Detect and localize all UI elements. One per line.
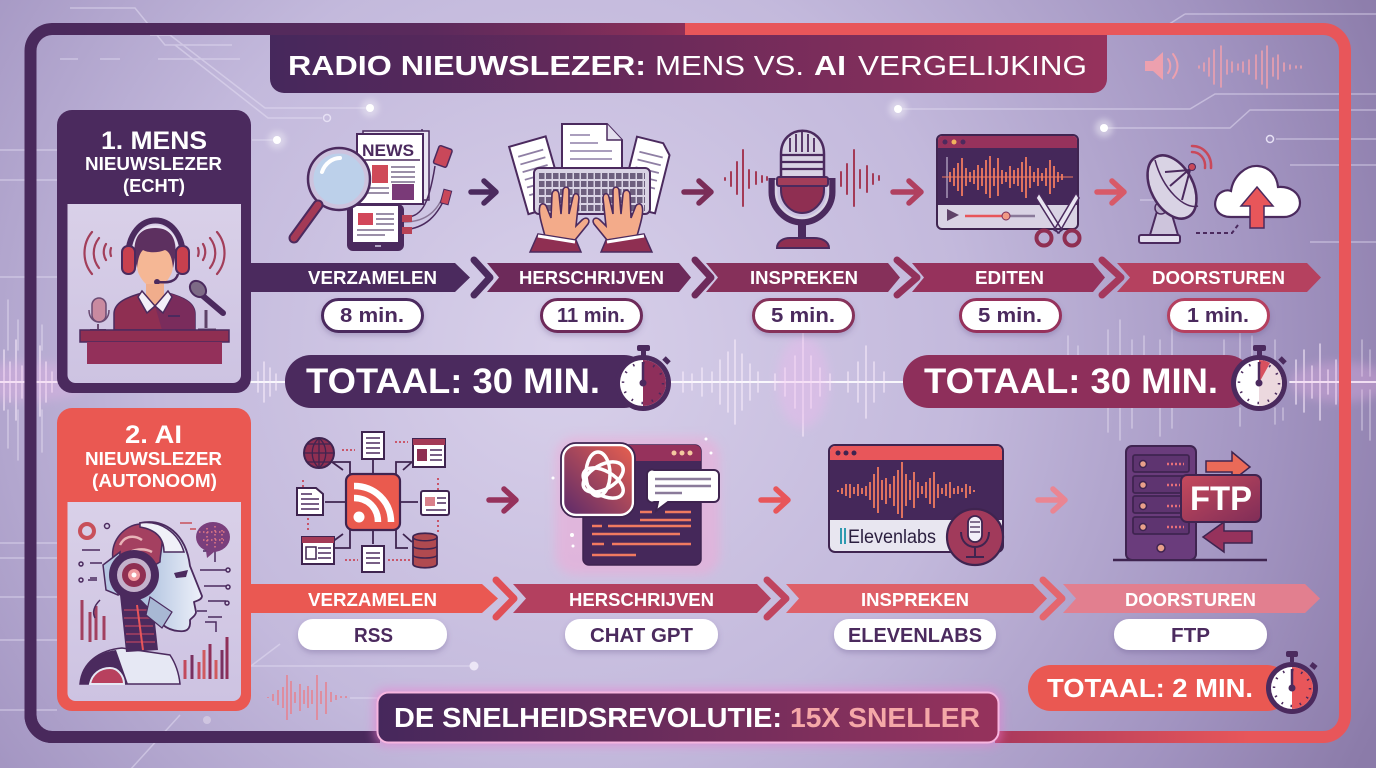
icon: rss network [297,432,449,572]
banner: speed revolution: DE SNELHEIDSREVOLUTIE: [394,702,782,733]
icon: audio editor window [937,135,1080,246]
icon: stopwatch half [615,345,671,411]
panel 1 heading: 1. MENS [101,127,207,155]
step: verzamelen [251,260,490,295]
step: verzamelen ai [251,580,514,617]
pill: elevenlabs: ELEVENLABS [848,625,982,647]
pill: 1 min [1168,300,1268,332]
title banner: VERGELIJKING [858,50,1087,81]
step: doorsturen ai [1063,584,1320,613]
icon: typing on keyboard [509,124,672,252]
panel 2 heading [85,421,222,491]
step: herschrijven [487,260,711,295]
process arrows: ai row [251,580,1320,617]
step: inspreken: INSPREKEN [750,268,858,288]
total: ai time: TOTAAL: 2 MIN. [1047,673,1253,703]
banner: speed revolution [374,689,1002,746]
step: doorsturen: DOORSTUREN [1152,268,1285,288]
panel 2 heading: NIEUWSLEZER [85,449,222,469]
pill: 5 min editen: 5 min. [978,305,1042,327]
pill: 5 min inspreken: 5 min. [771,305,835,327]
pill: 1 min: 1 min. [1187,305,1249,327]
panel 1 inner card [68,204,241,383]
total: human gross time: TOTAAL: 30 MIN. [306,362,600,401]
pill: 8 min: 8 min. [340,305,404,327]
panel: 1. mens nieuwslezer [57,110,251,393]
icon: human newsreader [80,220,229,364]
banner: speed revolution: 15X SNELLER [790,702,980,733]
panel: 2. ai nieuwslezer [57,408,251,711]
pill: ftp: FTP [1171,625,1210,647]
pill: chat gpt [565,619,718,650]
panel 2 heading: (AUTONOOM) [92,471,217,491]
step: verzamelen: VERZAMELEN [308,268,437,288]
pill: 8 min [322,300,422,332]
small waveform [268,675,346,720]
icon: ftp server: FTP [1190,480,1252,518]
icon: news gathering [294,129,453,251]
total: human gross time [285,345,671,411]
step: inspreken [706,260,917,295]
icon: brain bubble [196,522,230,558]
icon: satellite dish and cloud upload [1137,146,1300,243]
pill: ftp [1114,619,1267,650]
process arrows: human row [251,260,1321,295]
total: human net time: TOTAAL: 30 MIN. [924,362,1218,401]
icon: news gathering: NEWS [362,141,414,160]
arrow: rss to chat gpt [489,489,516,511]
icon: elevenlabs window [829,445,1003,565]
icon: stopwatch slice [1231,345,1287,411]
elevenlabs wordmark: Elevenlabs [848,527,936,548]
step: herschrijven ai: HERSCHRIJVEN [569,590,714,610]
arrow: chat gpt to elevenlabs [761,489,788,511]
step: herschrijven ai [513,580,786,617]
arrow: herschrijven to inspreken [684,181,711,203]
step: inspreken ai: INSPREKEN [861,590,969,610]
title banner: MENS VS. [655,50,804,81]
pill: elevenlabs [834,619,996,650]
step: doorsturen ai: DOORSTUREN [1125,590,1256,610]
time pills: human row [322,300,1268,332]
pill: 5 min inspreken [754,300,854,332]
panel 1 heading: (ECHT) [123,176,185,196]
icon: chat gpt window [552,437,720,575]
pill: rss [298,619,447,650]
robot circuit decoration [79,523,230,632]
step: verzamelen ai: VERZAMELEN [308,590,437,610]
step: editen [912,260,1121,295]
pill: 11 min: 11 min. [557,305,625,327]
icon: ftp server [1113,446,1267,560]
bar chart decoration [185,637,227,679]
step: doorsturen [1117,263,1321,292]
arrow: editen to doorsturen [1097,181,1124,203]
step: herschrijven: HERSCHRIJVEN [519,268,664,288]
title banner: AI [814,50,846,81]
background audio waveform [0,300,1376,460]
panel 1 heading [85,127,222,196]
step: inspreken ai [786,580,1062,617]
tool pills: ai row [298,619,1267,650]
total: human net time [903,345,1287,411]
icon: studio microphone [725,131,879,248]
icon: stopwatch ai [1266,651,1318,714]
pill: chat gpt: CHAT GPT [590,625,693,647]
panel 2 inner card [68,502,241,701]
title banner [270,35,1107,93]
panel 2 heading: 2. AI [125,421,182,449]
pill: 5 min editen [960,300,1060,332]
arrow: elevenlabs to ftp [1038,489,1065,511]
panel 1 heading: NIEUWSLEZER [85,154,222,174]
step: editen: EDITEN [975,268,1044,288]
total: ai time [1028,651,1318,714]
arrow: verzamelen to herschrijven [471,181,496,203]
background circuit nodes [203,99,1274,724]
icon: robot head [80,522,202,684]
arrow: inspreken to editen [893,181,921,203]
pill: 11 min [542,300,642,332]
icon: speaker and sound wave [1145,46,1301,88]
title banner: RADIO NIEUWSLEZER: [288,50,646,81]
pill: rss: RSS [354,625,393,647]
